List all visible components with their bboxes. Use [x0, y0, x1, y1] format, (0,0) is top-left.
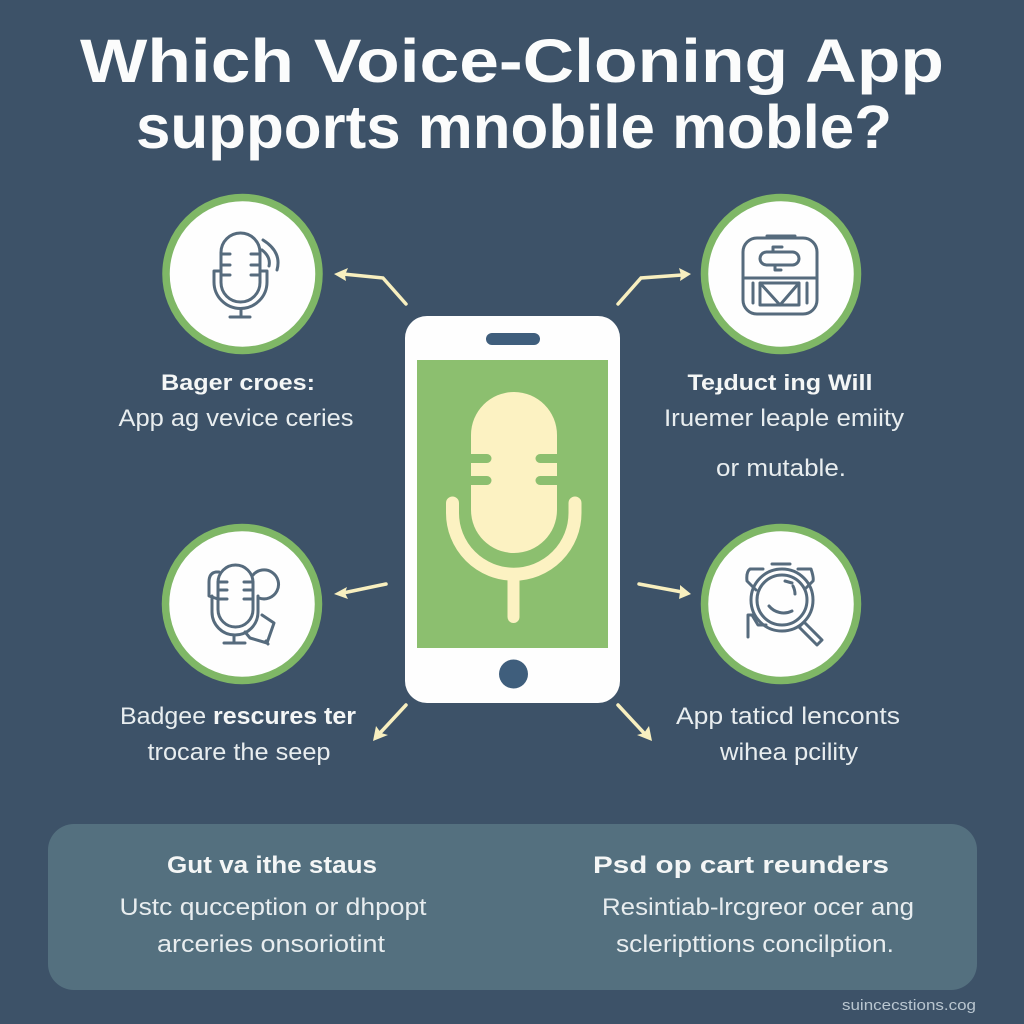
- icon: top-right backpack: [704, 198, 858, 350]
- text block: bottom left: Badgee rescures ter: [120, 703, 356, 730]
- panel text: left column: arceries onsoriotint: [157, 931, 385, 958]
- arrow: to top-right icon: [618, 268, 691, 304]
- panel text: right column: [593, 852, 914, 958]
- phone illustration: [405, 316, 620, 703]
- phone home button: [499, 660, 528, 688]
- arrow: to top-left icon: [334, 268, 406, 304]
- icon: bottom-left microphone with speech bubbles: [166, 528, 318, 680]
- panel text: right column: Resintiab-lrcgreor ocer ang: [602, 894, 914, 921]
- text block: top right: [664, 370, 904, 482]
- text block: bottom right: App taticd lenconts: [676, 703, 900, 730]
- large microphone: [452, 392, 575, 617]
- text block: top left: App ag vevice ceries: [118, 405, 354, 432]
- text block: top right: or mutable.: [716, 455, 846, 482]
- text block: bottom right: [676, 703, 900, 766]
- icon: top-left microphone with sound waves: [166, 198, 319, 350]
- phone speaker: [486, 333, 540, 345]
- text block: bottom left: trocare the seep: [148, 739, 330, 766]
- panel: bottom summary: [48, 824, 977, 990]
- icon: bottom-right magnifier: [704, 528, 858, 680]
- text block: top left: Bager croes:: [161, 370, 315, 395]
- title: supports mnobile moble?: [136, 93, 892, 161]
- phone screen: [417, 360, 608, 648]
- panel text: right column: Psd op cart reunders: [593, 852, 889, 879]
- arrow: to bottom-left icon: [334, 584, 386, 599]
- panel text: left column: Ustc qucception or dhpopt: [120, 894, 427, 921]
- title: [80, 27, 944, 161]
- text block: top right: Iruemer leaple emiity: [664, 405, 904, 432]
- title: Which Voice-Cloning App: [80, 27, 944, 95]
- arrow: lower right: [618, 705, 652, 741]
- panel text: left column: [120, 852, 427, 958]
- arrow: lower left: [373, 705, 406, 741]
- panel text: left column: Gut va ithe staus: [167, 852, 377, 879]
- footer source text: suincecstions.cog: [842, 997, 976, 1014]
- text block: top right: Teɟduct ing Will: [688, 370, 872, 395]
- panel text: right column: scleripttions concilption.: [616, 931, 894, 958]
- text block: top left: [118, 370, 354, 432]
- text block: bottom right: wihea pcility: [719, 739, 858, 766]
- arrow: to bottom-right icon: [639, 584, 691, 599]
- text block: bottom left: [120, 703, 356, 766]
